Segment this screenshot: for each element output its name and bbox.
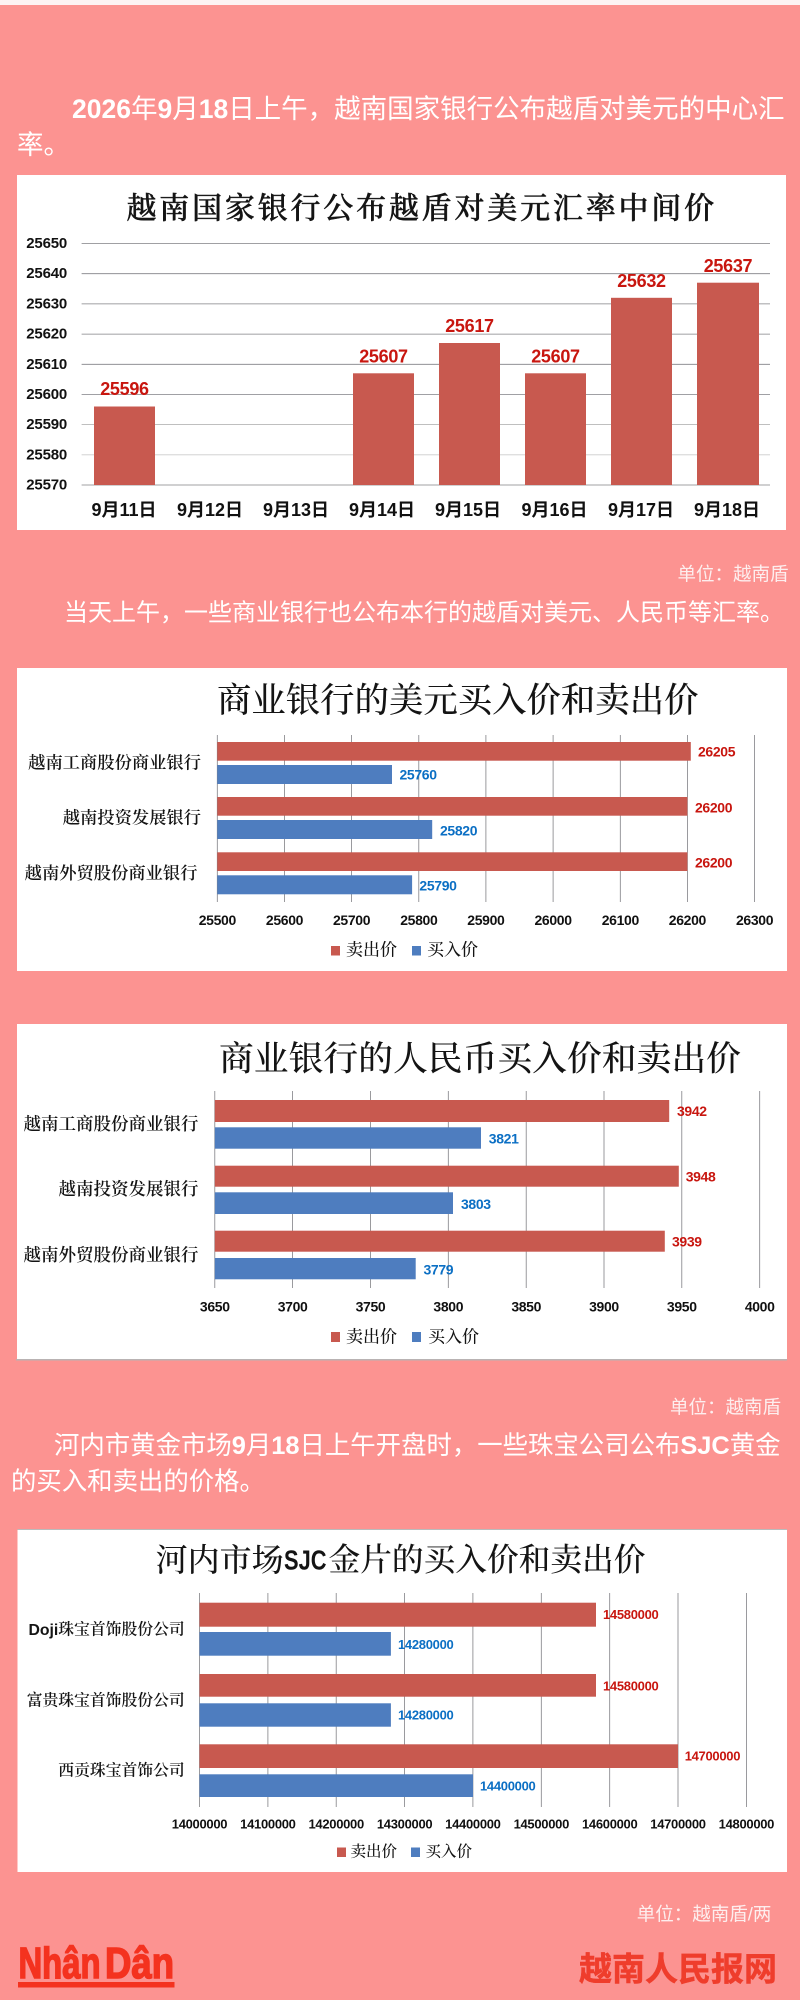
buy bars (215, 1127, 481, 1279)
x axis labels: 14400000 (445, 1816, 501, 1832)
x axis labels: 14600000 (582, 1816, 637, 1832)
y axis labels: 25640 (26, 265, 67, 282)
intro paragraph (17, 94, 785, 160)
sell bars (200, 1603, 678, 1768)
sell values (695, 744, 736, 871)
x axis labels (172, 1816, 774, 1832)
buy values: 14280000 (398, 1637, 454, 1652)
buy values (398, 1637, 536, 1794)
intro paragraph: 2026年9月18日上午，越南国家银行公布越盾对美元的中心汇 (72, 94, 785, 124)
paragraph: gold market: 的买入和卖出的价格。 (11, 1468, 265, 1496)
x axis labels: 14800000 (719, 1816, 774, 1832)
x axis labels (200, 1299, 775, 1315)
logo: Nhan Dan: Dân (105, 1939, 174, 1988)
buy values: 25760 (400, 767, 437, 783)
date axis labels: 9月18日 (694, 500, 760, 520)
y axis labels: 25650 (26, 235, 67, 252)
x axis labels: 3750 (356, 1299, 386, 1315)
legend: 卖出价 (346, 940, 397, 960)
y axis labels (26, 235, 67, 494)
x axis labels: 26000 (535, 912, 572, 928)
column value labels: 25632 (617, 271, 666, 291)
column bars (94, 283, 759, 485)
x axis labels: 14300000 (377, 1816, 432, 1832)
date axis labels: 9月11日 (91, 500, 157, 520)
bank names (25, 754, 201, 883)
chart title: RMB: 商业银行的人民币买入价和卖出价 (219, 1040, 741, 1078)
buy values: 14400000 (480, 1778, 536, 1794)
sell bars (215, 1100, 679, 1252)
x axis labels: 3700 (278, 1299, 308, 1315)
x axis labels: 25900 (467, 912, 505, 928)
x axis labels: 14200000 (308, 1816, 364, 1832)
logo: Vietnamese People's Daily site name: 越南人民报网 (579, 1950, 777, 1988)
company names (27, 1620, 185, 1780)
bank names: 越南外贸股份商业银行 (25, 864, 198, 883)
panel: SJC gold buy and sell bar chart (18, 1529, 787, 1872)
column value labels: 25617 (445, 316, 494, 336)
column value labels: 25607 (531, 346, 580, 366)
paragraph: gold market: 河内市黄金市场9月18日上午开盘时，一些珠宝公司公布SJC黄金 (54, 1432, 781, 1460)
buy values: 3779 (424, 1261, 454, 1277)
sell values: 3948 (686, 1169, 716, 1185)
buy values (424, 1131, 519, 1277)
bank names: 越南工商股份商业银行 (24, 1114, 198, 1134)
date axis labels: 9月16日 (521, 500, 588, 520)
date axis labels: 9月14日 (349, 500, 415, 520)
y axis labels: 25620 (26, 326, 67, 343)
buy values (400, 767, 478, 894)
y axis labels: 25580 (26, 446, 67, 463)
unit note 1: 单位：越南盾 (678, 564, 789, 584)
buy values: 3803 (461, 1196, 491, 1212)
bank names: 越南投资发展银行 (63, 808, 201, 828)
paragraph: gold market (11, 1432, 781, 1496)
x axis labels: 25600 (266, 912, 304, 928)
sell values (603, 1607, 740, 1764)
buy values: 25820 (440, 823, 478, 839)
bank names: 越南投资发展银行 (58, 1179, 198, 1199)
buy bars (217, 765, 432, 894)
buy bars (200, 1632, 473, 1797)
panel: central rate column chart (17, 175, 786, 530)
y axis labels: 25570 (26, 476, 67, 494)
legend (331, 940, 478, 960)
sell values: 26205 (698, 744, 736, 760)
sell values: 14580000 (603, 1678, 659, 1694)
column value labels: 25637 (704, 256, 753, 276)
x axis labels: 14000000 (172, 1816, 227, 1832)
x axis labels: 3800 (433, 1299, 464, 1315)
bank names: 越南外贸股份商业银行 (24, 1245, 198, 1265)
intro paragraph: 率。 (17, 130, 70, 160)
x axis labels (199, 912, 774, 928)
legend: 买入价 (427, 940, 478, 960)
date axis labels: 9月17日 (608, 500, 674, 520)
date axis labels: 9月12日 (177, 500, 243, 520)
sell values: 14700000 (685, 1748, 740, 1764)
x axis labels: 26300 (736, 912, 774, 928)
sell values (672, 1103, 716, 1250)
legend: 买入价 (428, 1328, 479, 1346)
date axis labels (91, 500, 760, 520)
company names: 富贵珠宝首饰股份公司 (27, 1690, 185, 1710)
chart title: USD: 商业银行的美元买入价和卖出价 (217, 682, 698, 720)
paragraph: commercial banks: 当天上午，一些商业银行也公布本行的越盾对美元、人民币等汇率。 (64, 600, 784, 626)
column value labels: 25607 (359, 346, 408, 366)
sell values: 3939 (672, 1234, 702, 1250)
chart title: central rate: 越南国家银行公布越盾对美元汇率中间价 (126, 192, 717, 226)
chart title: gold (156, 1542, 646, 1578)
sell values: 3942 (677, 1103, 707, 1119)
panel: USD buy and sell bar chart (17, 668, 787, 971)
x axis labels: 4000 (745, 1299, 775, 1315)
column value labels (100, 256, 753, 399)
y axis labels: 25610 (26, 356, 67, 373)
company names: 西贡珠宝首饰公司 (58, 1760, 185, 1780)
logo: Nhan Dan: Nhân (18, 1939, 100, 1988)
y axis labels: 25630 (26, 295, 67, 312)
x axis labels: 26100 (602, 912, 639, 928)
sell values: 26200 (695, 855, 733, 871)
x axis labels: 3850 (511, 1299, 542, 1315)
chart title: gold: 河内市场 (156, 1542, 284, 1578)
x axis labels: 3900 (589, 1299, 619, 1315)
legend: 买入价 (426, 1842, 473, 1860)
x axis labels: 25500 (199, 912, 236, 928)
panel: RMB buy and sell bar chart (16, 1024, 787, 1360)
buy values: 14280000 (398, 1708, 454, 1722)
y axis labels: 25590 (26, 416, 67, 433)
sell values: 14580000 (603, 1607, 659, 1622)
date axis labels: 9月15日 (435, 500, 501, 520)
chart title: gold: 金片的买入价和卖出价 (328, 1542, 646, 1578)
unit note 3: 单位：越南盾/两 (637, 1904, 771, 1924)
date axis labels: 9月13日 (263, 500, 329, 520)
legend: 卖出价 (346, 1328, 397, 1346)
bank names (24, 1114, 198, 1265)
buy values: 3821 (489, 1131, 519, 1147)
company names: Doji珠宝首饰股份公司 (28, 1620, 185, 1638)
sell bars (217, 742, 691, 871)
x axis labels: 25700 (333, 912, 371, 928)
bank names: 越南工商股份商业银行 (28, 754, 201, 772)
unit note 2: 单位：越南盾 (670, 1396, 781, 1418)
buy values: 25790 (419, 878, 457, 894)
x axis labels: 3650 (200, 1299, 230, 1315)
chart title: gold: SJC (284, 1544, 326, 1576)
legend (337, 1842, 473, 1860)
legend (331, 1328, 479, 1346)
x axis labels: 25800 (400, 912, 438, 928)
x axis labels: 3950 (667, 1299, 697, 1315)
x axis labels: 14500000 (514, 1816, 569, 1832)
legend: 卖出价 (350, 1842, 398, 1860)
y axis labels: 25600 (26, 386, 67, 403)
x axis labels: 14100000 (240, 1816, 296, 1832)
x axis labels: 14700000 (650, 1816, 706, 1832)
sell values: 26200 (695, 800, 733, 816)
x axis labels: 26200 (669, 912, 707, 928)
column value labels: 25596 (100, 379, 149, 399)
